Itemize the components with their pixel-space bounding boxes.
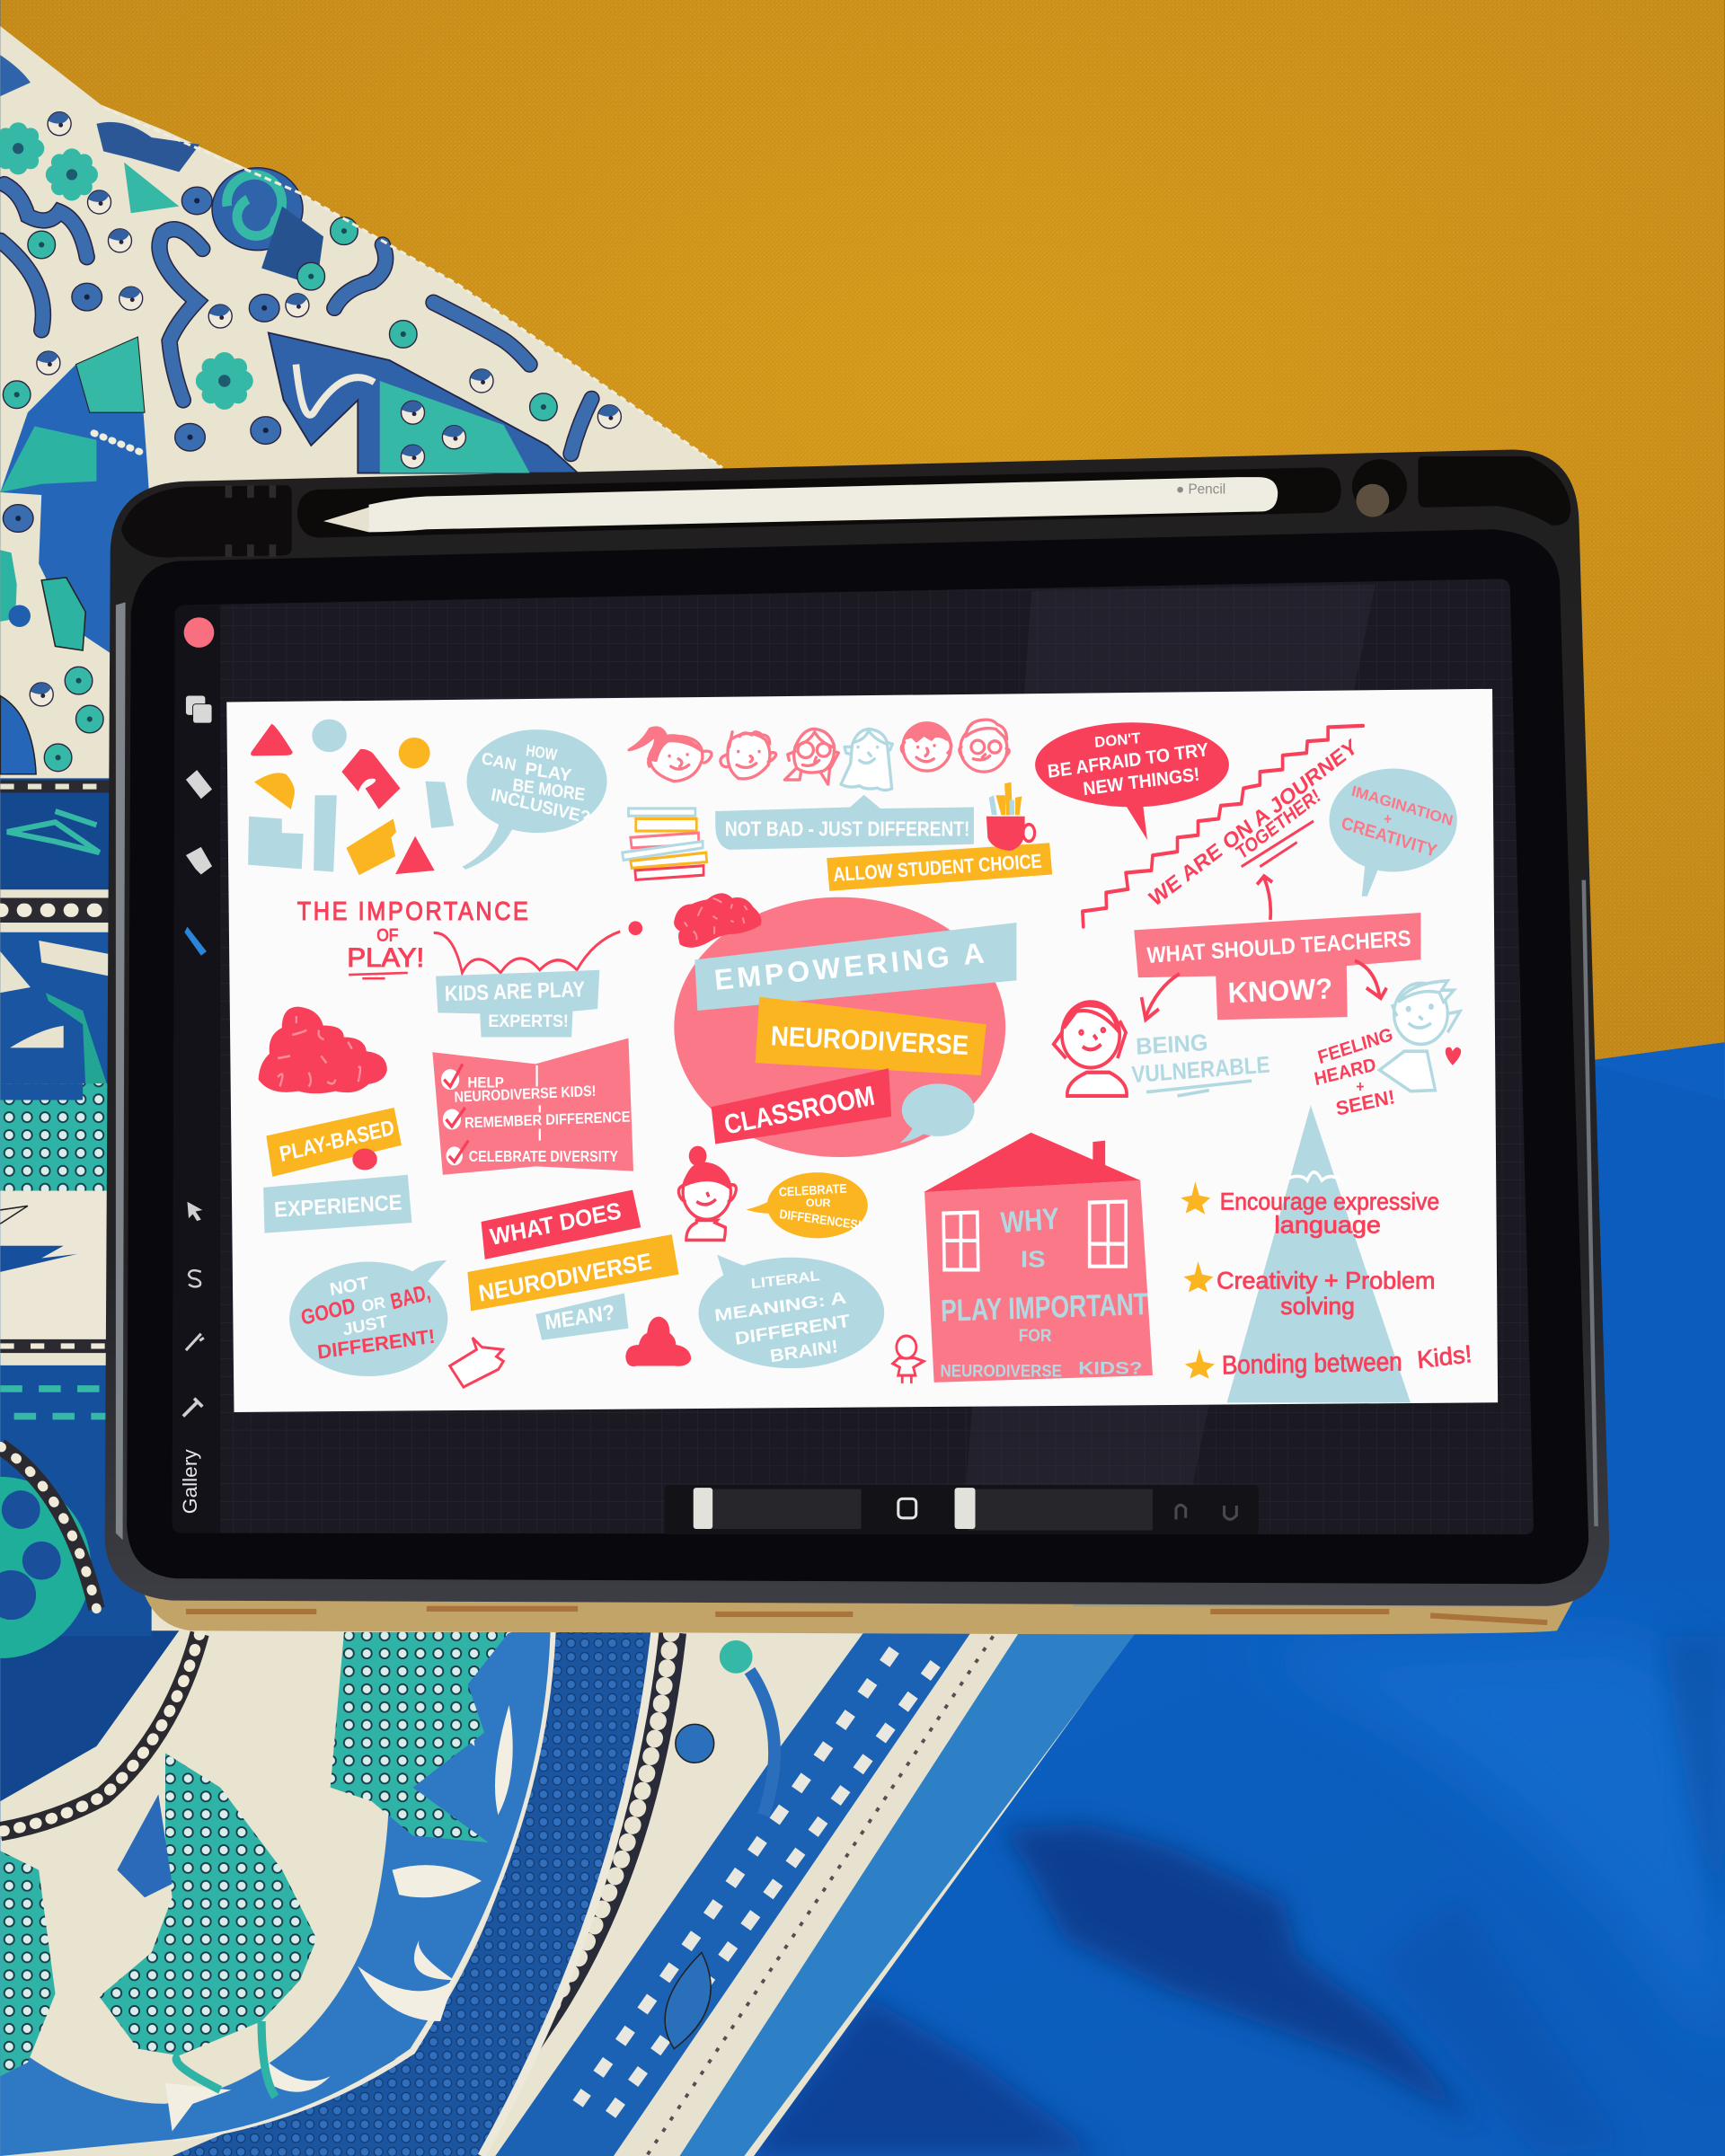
speech bubble: celebrate our differences: DIFFERENCES!: [779, 1206, 862, 1233]
benefit: bonding between kids: [1185, 1341, 1473, 1380]
speech bubble: how can play be more inclusive: HOW: [525, 741, 558, 764]
left half of the sketchnote: [248, 720, 884, 1387]
fabric band: cream floral strip: [454, 1632, 864, 2156]
fabric band: beaded dark ring: [447, 1632, 671, 2156]
speech bubble: not good or bad, just different: BAD,: [388, 1280, 432, 1315]
arrow up to together: [1257, 876, 1272, 920]
benefit: encourage expressive language: Encourage expressive: [1220, 1188, 1439, 1215]
house: why is play important: NEURODIVERSE: [940, 1361, 1062, 1381]
text: feeling heard and seen: FEELING: [1316, 1024, 1395, 1068]
bouncing ball path: [434, 921, 642, 973]
right case cutout: [1418, 456, 1570, 526]
selection tool: [189, 1270, 201, 1286]
speech bubble: not good or bad, just different: GOOD: [299, 1294, 357, 1330]
title banner: empowering a: [694, 923, 1016, 1011]
benefit: creativity and problem solving: solving: [1280, 1294, 1355, 1320]
banner: experience: [263, 1175, 411, 1233]
wrench tool: [183, 1399, 202, 1417]
fabric motif: left strip bands: [0, 778, 152, 1658]
fabric motif: deer upper: [331, 1632, 509, 1842]
speech bubble: don't be afraid: NEW THINGS!: [1082, 764, 1200, 800]
face: girl with veil: [841, 729, 892, 791]
background: mustard fabric: [0, 0, 1725, 1100]
fabric band: stitched cream border: [612, 1632, 1019, 2156]
gallery label: Gallery: [179, 1448, 201, 1514]
fabric motif: left fish and blue body: [0, 337, 155, 653]
wand tool: [186, 1334, 204, 1350]
small red cloud brain: [625, 1317, 691, 1366]
speech bubble: not good or bad, just different: NOT: [328, 1272, 370, 1299]
speech bubble: don't be afraid: DON'T: [1094, 730, 1142, 751]
fabric band: medium blue arc: [0, 1632, 551, 2156]
house: why is play important: PLAY IMPORTANT: [941, 1286, 1149, 1328]
title banner: empowering a: EMPOWERING A: [712, 937, 986, 996]
speech bubble: literal meaning: LITERAL: [750, 1268, 820, 1293]
face: boy with fringe: [901, 723, 951, 771]
mug with pencils: [986, 782, 1035, 851]
benefit: bonding between kids: Bonding between: [1222, 1347, 1402, 1380]
house: why is play important: FOR: [1019, 1325, 1052, 1345]
fabric motif: flowers: [0, 122, 44, 174]
speech bubble: not good or bad, just different: [289, 1260, 447, 1376]
speech bubble: how can play be more inclusive: CAN: [480, 748, 518, 774]
face: child with curls and glasses: [960, 720, 1009, 772]
banner: what does: [482, 1189, 641, 1259]
heading: the importance of play: PLAY!: [347, 943, 424, 973]
fabric motif: deer lower: [100, 1754, 316, 2055]
apple pencil: [323, 477, 1278, 532]
speech bubble: how can play be more inclusive: [462, 729, 607, 870]
speech bubble: literal meaning: [699, 1255, 884, 1368]
banner: what should teachers know: WHAT SHOULD TEACHERS: [1146, 926, 1411, 968]
speech bubble: literal meaning: DIFFERENT: [734, 1311, 852, 1348]
undo arrow: [1176, 1505, 1186, 1519]
open book checklist: [432, 1038, 633, 1175]
open book checklist: REMEMBER DIFFERENCE: [464, 1109, 631, 1132]
tablet screen: [127, 529, 1588, 1584]
face: child with curly hair: [721, 732, 776, 779]
top banner: not bad just different: [715, 795, 974, 850]
house: why is play important: IS: [1021, 1247, 1046, 1273]
banner: what should teachers know: [1134, 913, 1420, 1020]
speech bubble: not good or bad, just different: OR: [360, 1294, 386, 1316]
drawing board: [226, 689, 1498, 1412]
color dot: [184, 617, 214, 648]
speech bubble: not good or bad, just different: JUST: [341, 1312, 389, 1339]
benefit: bonding between kids: Kids!: [1416, 1341, 1473, 1374]
smudge icon: [186, 847, 212, 874]
open book checklist: CELEBRATE DIVERSITY: [469, 1147, 618, 1165]
opacity slider handle: [955, 1488, 976, 1529]
banner: what should teachers know: KNOW?: [1227, 973, 1333, 1010]
zigzag staircase: [1083, 726, 1363, 927]
banner: kids are play experts: [436, 970, 599, 1038]
tablet case: [105, 450, 1609, 1606]
benefit: encourage expressive language: [1181, 1181, 1439, 1239]
speech bubble: how can play be more inclusive: PLAY: [524, 758, 573, 785]
large red brain: [259, 1007, 387, 1093]
speech bubble: imagination and creativity: +: [1384, 810, 1392, 828]
fabric motif: deer left edge: [0, 1851, 56, 2076]
speech bubble: celebrate our differences: OUR: [806, 1197, 831, 1209]
face: girl with ponytail: [629, 728, 712, 782]
speech bubble: celebrate our differences: [746, 1172, 868, 1238]
banner: what does: WHAT DOES: [489, 1198, 623, 1250]
arrow to feeling heard: [1355, 960, 1386, 998]
benefit: creativity and problem solving: [1183, 1261, 1436, 1320]
fabric band: dark blue floral strip: [495, 1632, 971, 2156]
house: why is play important: [924, 1133, 1153, 1383]
opacity slider track: [969, 1489, 1153, 1531]
heading: the importance of play: [297, 897, 528, 978]
central title circle: [674, 897, 1005, 1157]
modify button: [898, 1498, 916, 1518]
heading: the importance of play: OF: [376, 924, 398, 945]
speech bubble: don't be afraid: BE AFRAID TO TRY: [1047, 739, 1209, 782]
text: feeling heard and seen: +: [1356, 1078, 1365, 1096]
heading: the importance of play: THE IMPORTANCE: [297, 897, 528, 925]
face: girl with glasses: [784, 729, 838, 784]
size slider track: [704, 1489, 861, 1529]
brush icon: [184, 927, 207, 956]
banner: allow student choice: ALLOW STUDENT CHOICE: [833, 850, 1042, 886]
banner: kids are play experts: EXPERTS!: [488, 1011, 569, 1030]
speech bubble: celebrate our differences: CELEBRATE: [779, 1181, 847, 1199]
speech bubble: not good or bad, just different: DIFFERENT!: [316, 1325, 437, 1364]
book stack: [623, 808, 707, 879]
tablet cover edge: [145, 1595, 1576, 1634]
banner: experience: EXPERIENCE: [274, 1190, 402, 1222]
apple pencil: ● Pencil: [1176, 482, 1225, 497]
pencil channel: [297, 467, 1341, 537]
fabric motif: seam stitch: [103, 107, 722, 467]
banner: neurodiverse: [467, 1234, 679, 1311]
connector dot: [352, 1148, 377, 1171]
building blocks: [248, 720, 454, 875]
text: being vulnerable: VULNERABLE: [1131, 1052, 1270, 1089]
benefit: creativity and problem solving: Creativity + Problem: [1216, 1268, 1436, 1294]
banner: neurodiverse: NEURODIVERSE: [477, 1249, 653, 1307]
size slider handle: [694, 1488, 712, 1529]
fabric motif: squiggles: [0, 184, 591, 454]
speech bubble: literal meaning: MEANING: A: [713, 1287, 847, 1325]
banner: kids are play experts: KIDS ARE PLAY: [445, 977, 585, 1006]
row of kid faces: [629, 720, 1009, 791]
house: why is play important: KIDS?: [1078, 1357, 1142, 1378]
fabric motif: shell swirl: [212, 168, 303, 251]
small child figure: [893, 1336, 924, 1383]
banner: play-based: [266, 1108, 402, 1177]
title banner: neurodiverse: NEURODIVERSE: [770, 1021, 969, 1061]
layers icon: [186, 695, 212, 723]
text: being vulnerable: BEING: [1136, 1030, 1208, 1060]
fabric motif: triangle blue shape: [269, 332, 578, 473]
canvas background with grid: [172, 579, 1534, 1534]
fabric band: light blue border: [679, 1632, 1137, 2156]
arrow tool: [187, 1202, 202, 1221]
text: feeling heard and seen: SEEN!: [1334, 1086, 1397, 1120]
small red brain above title: [674, 893, 761, 948]
procreate side toolbar: [179, 617, 214, 1514]
text: we are on a journey together: WE ARE ON A JOURNEY: [1146, 735, 1361, 911]
eraser icon: [186, 770, 212, 799]
text: feeling heard and seen: HEARD: [1313, 1055, 1377, 1091]
title banner: neurodiverse: [756, 997, 986, 1075]
speech bubble: how can play be more inclusive: INCLUSIVE?: [490, 784, 592, 827]
girl with hair bun: [678, 1147, 736, 1240]
fabric motif: medallion ring: [0, 1630, 179, 1801]
left case cutout: [121, 485, 292, 558]
thumbs up icon: [450, 1338, 503, 1387]
heart icon: [1446, 1047, 1461, 1065]
banner: mean: [535, 1294, 628, 1340]
redo arrow: [1225, 1506, 1236, 1519]
background: blue fabric: [688, 1042, 1725, 2156]
speech bubble: imagination and creativity: [1329, 768, 1457, 897]
procreate bottom controls: [665, 1485, 1259, 1534]
right rim highlight: [1582, 880, 1598, 1526]
open book checklist: NEURODIVERSE KIDS!: [454, 1083, 597, 1106]
background: paisley fabric: [0, 26, 1137, 2156]
text: we are on a journey together: TOGETHER!: [1233, 785, 1324, 864]
mountain: [1227, 1105, 1411, 1402]
title banner: classroom: CLASSROOM: [721, 1081, 877, 1141]
speech bubble: imagination and creativity: IMAGINATION: [1349, 783, 1455, 829]
girl illustration: [1054, 1002, 1127, 1096]
right half of the sketchnote: [893, 722, 1473, 1402]
open book checklist: HELP: [467, 1075, 504, 1091]
fabric band: blue beads: [172, 1632, 653, 2156]
text: feeling heard and seen: [1313, 1024, 1397, 1120]
fabric motif: eye dots: [3, 112, 621, 532]
benefit: encourage expressive language: language: [1274, 1212, 1381, 1239]
house: why is play important: WHY: [1000, 1201, 1060, 1240]
text: being vulnerable: [1131, 1030, 1270, 1096]
empty blue speech bubble: [899, 1083, 975, 1143]
boy illustration: [1380, 981, 1460, 1091]
speech bubble: how can play be more inclusive: BE MORE: [512, 774, 586, 804]
banner: play-based: PLAY-BASED: [278, 1116, 396, 1166]
round case hole: [1352, 459, 1407, 517]
speech bubble: literal meaning: BRAIN!: [769, 1336, 839, 1366]
banner: mean: MEAN?: [544, 1300, 616, 1335]
speech bubble: imagination and creativity: CREATIVITY: [1340, 812, 1439, 861]
speech bubble: don't be afraid: [1035, 722, 1229, 840]
arrow to being vulnerable: [1142, 974, 1180, 1020]
left rim highlight: [116, 602, 126, 1540]
top banner: not bad just different: NOT BAD - JUST DIFFERENT!: [725, 817, 969, 841]
